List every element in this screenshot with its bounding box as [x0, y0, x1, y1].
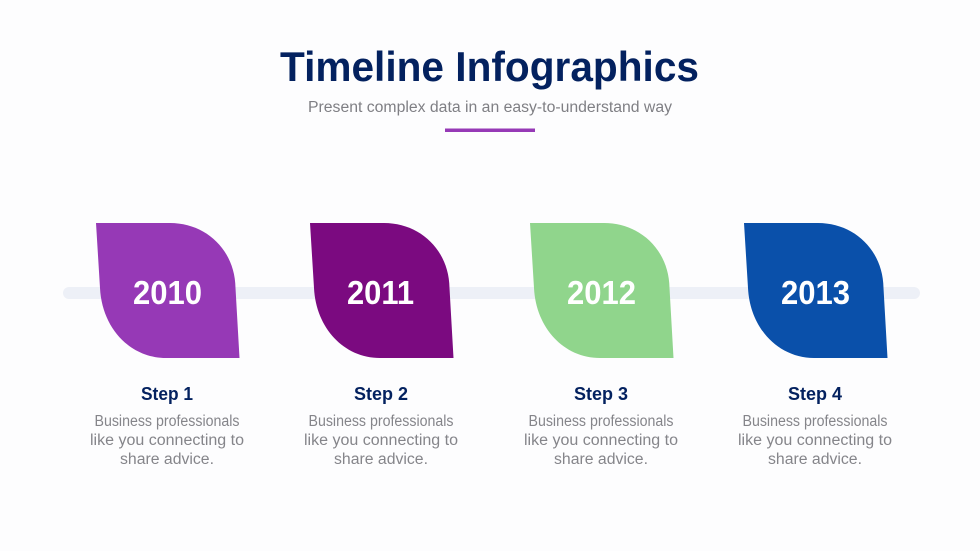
- step 1 marker: 2010: [133, 274, 202, 311]
- step 3 text: like you connecting to: [524, 432, 678, 449]
- step 1 marker: [96, 223, 240, 358]
- step 2 text: Business professionals: [308, 413, 454, 430]
- step 4 text: Business professionals: [742, 413, 888, 430]
- step 3 text: share advice.: [554, 451, 648, 468]
- step 3 text: [524, 384, 678, 468]
- timeline track: [63, 287, 920, 299]
- step 1 text: like you connecting to: [90, 432, 244, 449]
- step 4 text: [738, 384, 892, 468]
- step 1 text: share advice.: [120, 451, 214, 468]
- title: Timeline Infographics: [280, 43, 699, 90]
- step 2 marker: 2011: [347, 274, 414, 311]
- step 4 marker: 2013: [781, 274, 850, 311]
- step 2 marker: [310, 223, 454, 358]
- step 4 text: share advice.: [768, 451, 862, 468]
- title accent underline: [445, 128, 535, 132]
- subtitle: Present complex data in an easy-to-understand way: [308, 99, 672, 116]
- step 2 text: [304, 384, 458, 468]
- step 2 text: like you connecting to: [304, 432, 458, 449]
- step 3 marker: 2012: [567, 274, 636, 311]
- step 3 marker: [530, 223, 674, 358]
- step 2 text: Step 2: [354, 384, 408, 404]
- step 3 text: Business professionals: [528, 413, 674, 430]
- step 1 text: [90, 384, 244, 468]
- step 4 marker: [744, 223, 888, 358]
- step 3 text: Step 3: [574, 384, 628, 404]
- step 2 text: share advice.: [334, 451, 428, 468]
- step 4 text: like you connecting to: [738, 432, 892, 449]
- step 4 text: Step 4: [788, 384, 842, 404]
- step 1 text: Step 1: [141, 384, 193, 404]
- step 1 text: Business professionals: [94, 413, 240, 430]
